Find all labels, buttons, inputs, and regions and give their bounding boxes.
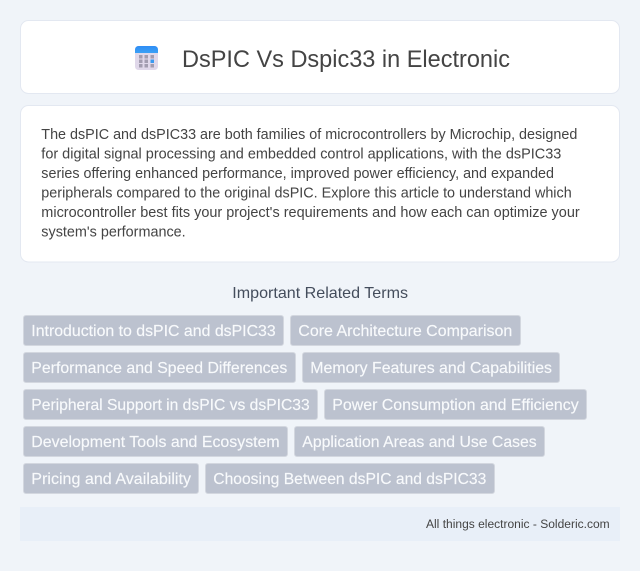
text block: description: microcontroller best fits your project's requirements and how each can optimize your: [41, 205, 580, 221]
chip: Introduction to dsPIC and dsPIC33: [31, 323, 276, 340]
chip: Peripheral Support in dsPIC vs dsPIC33: [31, 397, 310, 414]
text block: description: for digital signal processing and embedded control applications, with the dsPIC33: [41, 146, 561, 162]
text block: description: peripherals compared to the original dsPIC. Explore this article to understand which: [41, 186, 572, 202]
text block: description: series offering enhanced performance, improved power efficiency, and expanded: [41, 166, 554, 182]
chip: [24, 426, 288, 456]
icon: calendar grid: [135, 46, 158, 70]
chip: [302, 352, 560, 382]
panel: description: [20, 106, 620, 262]
chip: [324, 390, 586, 420]
chip: [294, 426, 544, 456]
chip: Pricing and Availability: [31, 471, 191, 488]
chip: Memory Features and Capabilities: [310, 360, 552, 377]
text block: description: system's performance.: [41, 224, 186, 240]
chip: [24, 464, 198, 494]
text block: description: [41, 127, 580, 240]
chip: Performance and Speed Differences: [31, 360, 287, 377]
chip: Choosing Between dsPIC and dsPIC33: [213, 471, 486, 488]
chip: [290, 316, 520, 346]
heading: related terms: Important Related Terms: [232, 285, 408, 302]
chip: Power Consumption and Efficiency: [332, 397, 579, 414]
chip: Core Architecture Comparison: [298, 323, 512, 340]
footer text: All things electronic - Solderic.com: [426, 517, 610, 531]
chip: Development Tools and Ecosystem: [31, 434, 280, 451]
title: DsPIC Vs Dspic33 in Electronic: [182, 46, 510, 73]
chip: Application Areas and Use Cases: [302, 434, 537, 451]
chip: [24, 316, 284, 346]
text block: description: The dsPIC and dsPIC33 are both families of microcontrollers by Microchip, designed: [41, 127, 577, 143]
chip: [24, 390, 318, 420]
chip: [206, 464, 494, 494]
chip: [24, 352, 296, 382]
panel: related terms chips: [24, 316, 586, 494]
footer bar: [20, 507, 620, 541]
panel: header: [20, 20, 620, 94]
